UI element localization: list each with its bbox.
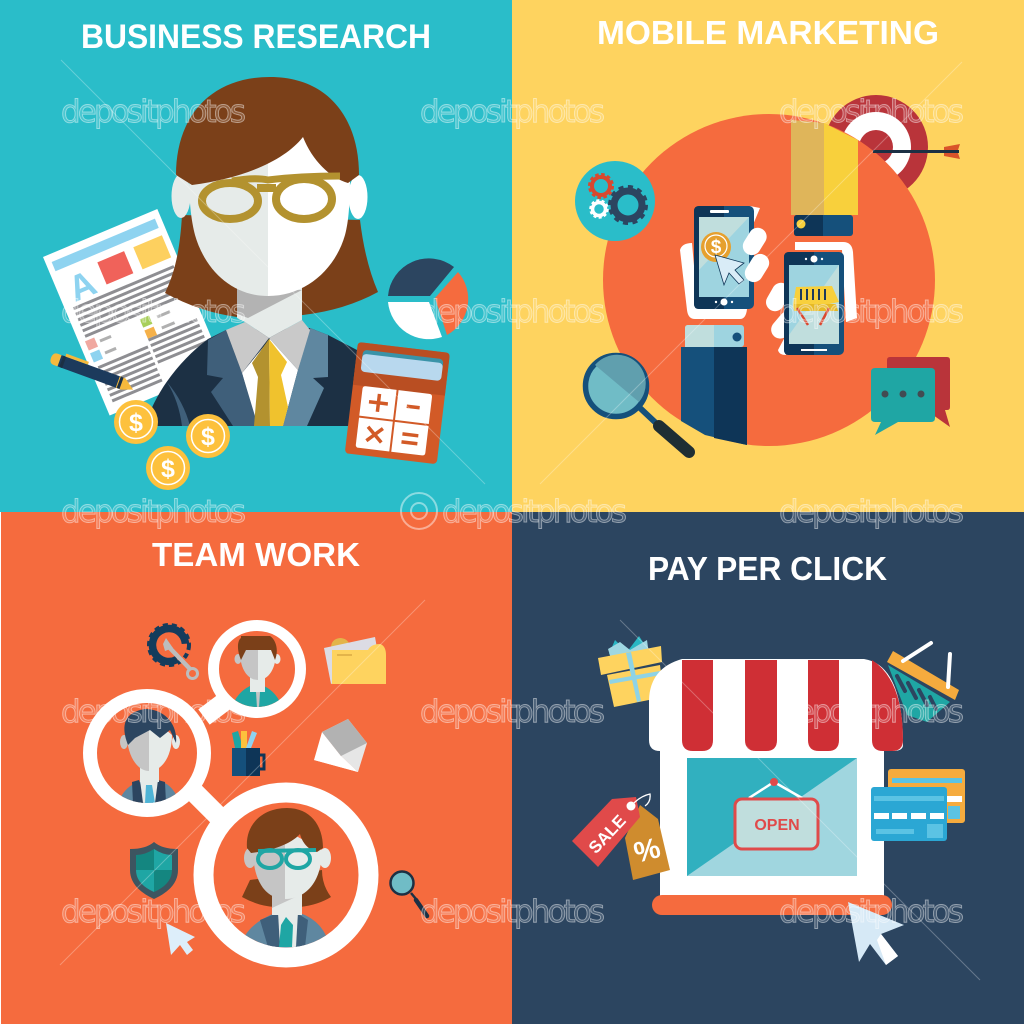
open sign: [735, 778, 818, 849]
panel: business research: [0, 0, 512, 512]
icon: price tags: [572, 794, 670, 880]
face: [189, 120, 268, 296]
hair top fringe: [176, 77, 359, 185]
icon: gear and wrench: [146, 622, 198, 678]
watermarks: depositphotos: [779, 94, 964, 130]
watermarks: depositphotos: [61, 294, 246, 330]
watermarks: depositphotos: [61, 94, 246, 130]
heading: mobile marketing: MOBILE MARKETING: [597, 14, 939, 51]
illustration: businesswoman: [145, 77, 378, 426]
watermarks: depositphotos: [442, 494, 627, 530]
icon: basket: [887, 643, 959, 722]
glasses: [202, 176, 340, 219]
icon: cursor on phone: [715, 255, 744, 285]
watermarks: depositphotos: [61, 694, 246, 730]
chart: pie: [388, 258, 468, 339]
icon: gears badge: [575, 161, 655, 241]
shirt: [242, 339, 298, 426]
icon: coins: $: [129, 409, 143, 437]
icon: folder: [324, 637, 386, 684]
icon: dollar coin on phone: $: [711, 237, 722, 258]
icon: arrow: [873, 144, 960, 159]
icon: small magnifier: [390, 872, 427, 916]
icon: price tags: %: [631, 832, 664, 870]
hair back: [165, 215, 378, 317]
heading: pay per click: PAY PER CLICK: [648, 550, 887, 587]
collar: [226, 322, 269, 373]
icon: cursor: [166, 923, 195, 955]
window: [687, 758, 857, 876]
avatar: top man: [214, 626, 300, 712]
watermarks: depositphotos: [61, 894, 246, 930]
watermarks: [61, 94, 964, 930]
shop body: [660, 745, 884, 897]
icon: large cursor: [848, 902, 904, 965]
panel: pay per click: [512, 512, 1024, 1024]
panel: mobile marketing: [512, 0, 1024, 512]
heading: team work: TEAM WORK: [152, 536, 360, 573]
shop base: [652, 895, 892, 915]
watermarks: depositphotos: [420, 894, 605, 930]
icon: pencil cup: [232, 731, 264, 776]
watermarks: depositphotos: [779, 894, 964, 930]
avatar: big woman: [204, 792, 368, 958]
icon: coins: [114, 400, 230, 490]
watermarks: depositphotos: [61, 494, 246, 530]
icon: chat bubbles: [871, 357, 950, 435]
icon: coins: $: [201, 423, 215, 451]
icon: magnifier: [586, 355, 689, 452]
icon: envelope: [314, 719, 367, 772]
icon: shield: [130, 842, 178, 899]
watermarks: depositphotos: [779, 294, 964, 330]
hand with yellow sleeve and phone: [763, 120, 858, 355]
open sign: OPEN: [754, 817, 800, 834]
icon: newspaper document: [43, 209, 224, 416]
network connectors: [192, 699, 228, 822]
icon: pen: [49, 349, 137, 393]
watermarks: depositphotos: [420, 694, 605, 730]
storefront: [649, 659, 903, 915]
icon: coins: $: [161, 455, 175, 483]
watermarks: depositphotos: [779, 494, 964, 530]
orange circle: [603, 114, 935, 446]
lapels: [207, 330, 258, 426]
neck: [237, 285, 302, 338]
watermarks: depositphotos: [420, 294, 605, 330]
panel: team work: [1, 512, 512, 1024]
icon: calculator: [345, 342, 450, 464]
icon: dollar coin on phone: [701, 232, 731, 262]
icon: price tags: SALE: [585, 811, 630, 857]
icon: gift: [598, 636, 664, 707]
tie: [252, 339, 270, 426]
heading: business research: BUSINESS RESEARCH: [81, 18, 431, 56]
watermarks: depositphotos: [420, 94, 605, 130]
icon: credit cards: [871, 769, 965, 841]
ears: [172, 174, 190, 218]
avatar: middle man: [90, 696, 204, 810]
hand with blue sleeve and phone: [680, 206, 773, 445]
suit: [145, 328, 357, 426]
icon: target: [824, 95, 928, 199]
awning: [649, 659, 903, 751]
icon: newspaper document: A: [62, 262, 102, 310]
icon: shopping basket on phone: [793, 286, 839, 325]
watermarks: depositphotos: [779, 694, 964, 730]
